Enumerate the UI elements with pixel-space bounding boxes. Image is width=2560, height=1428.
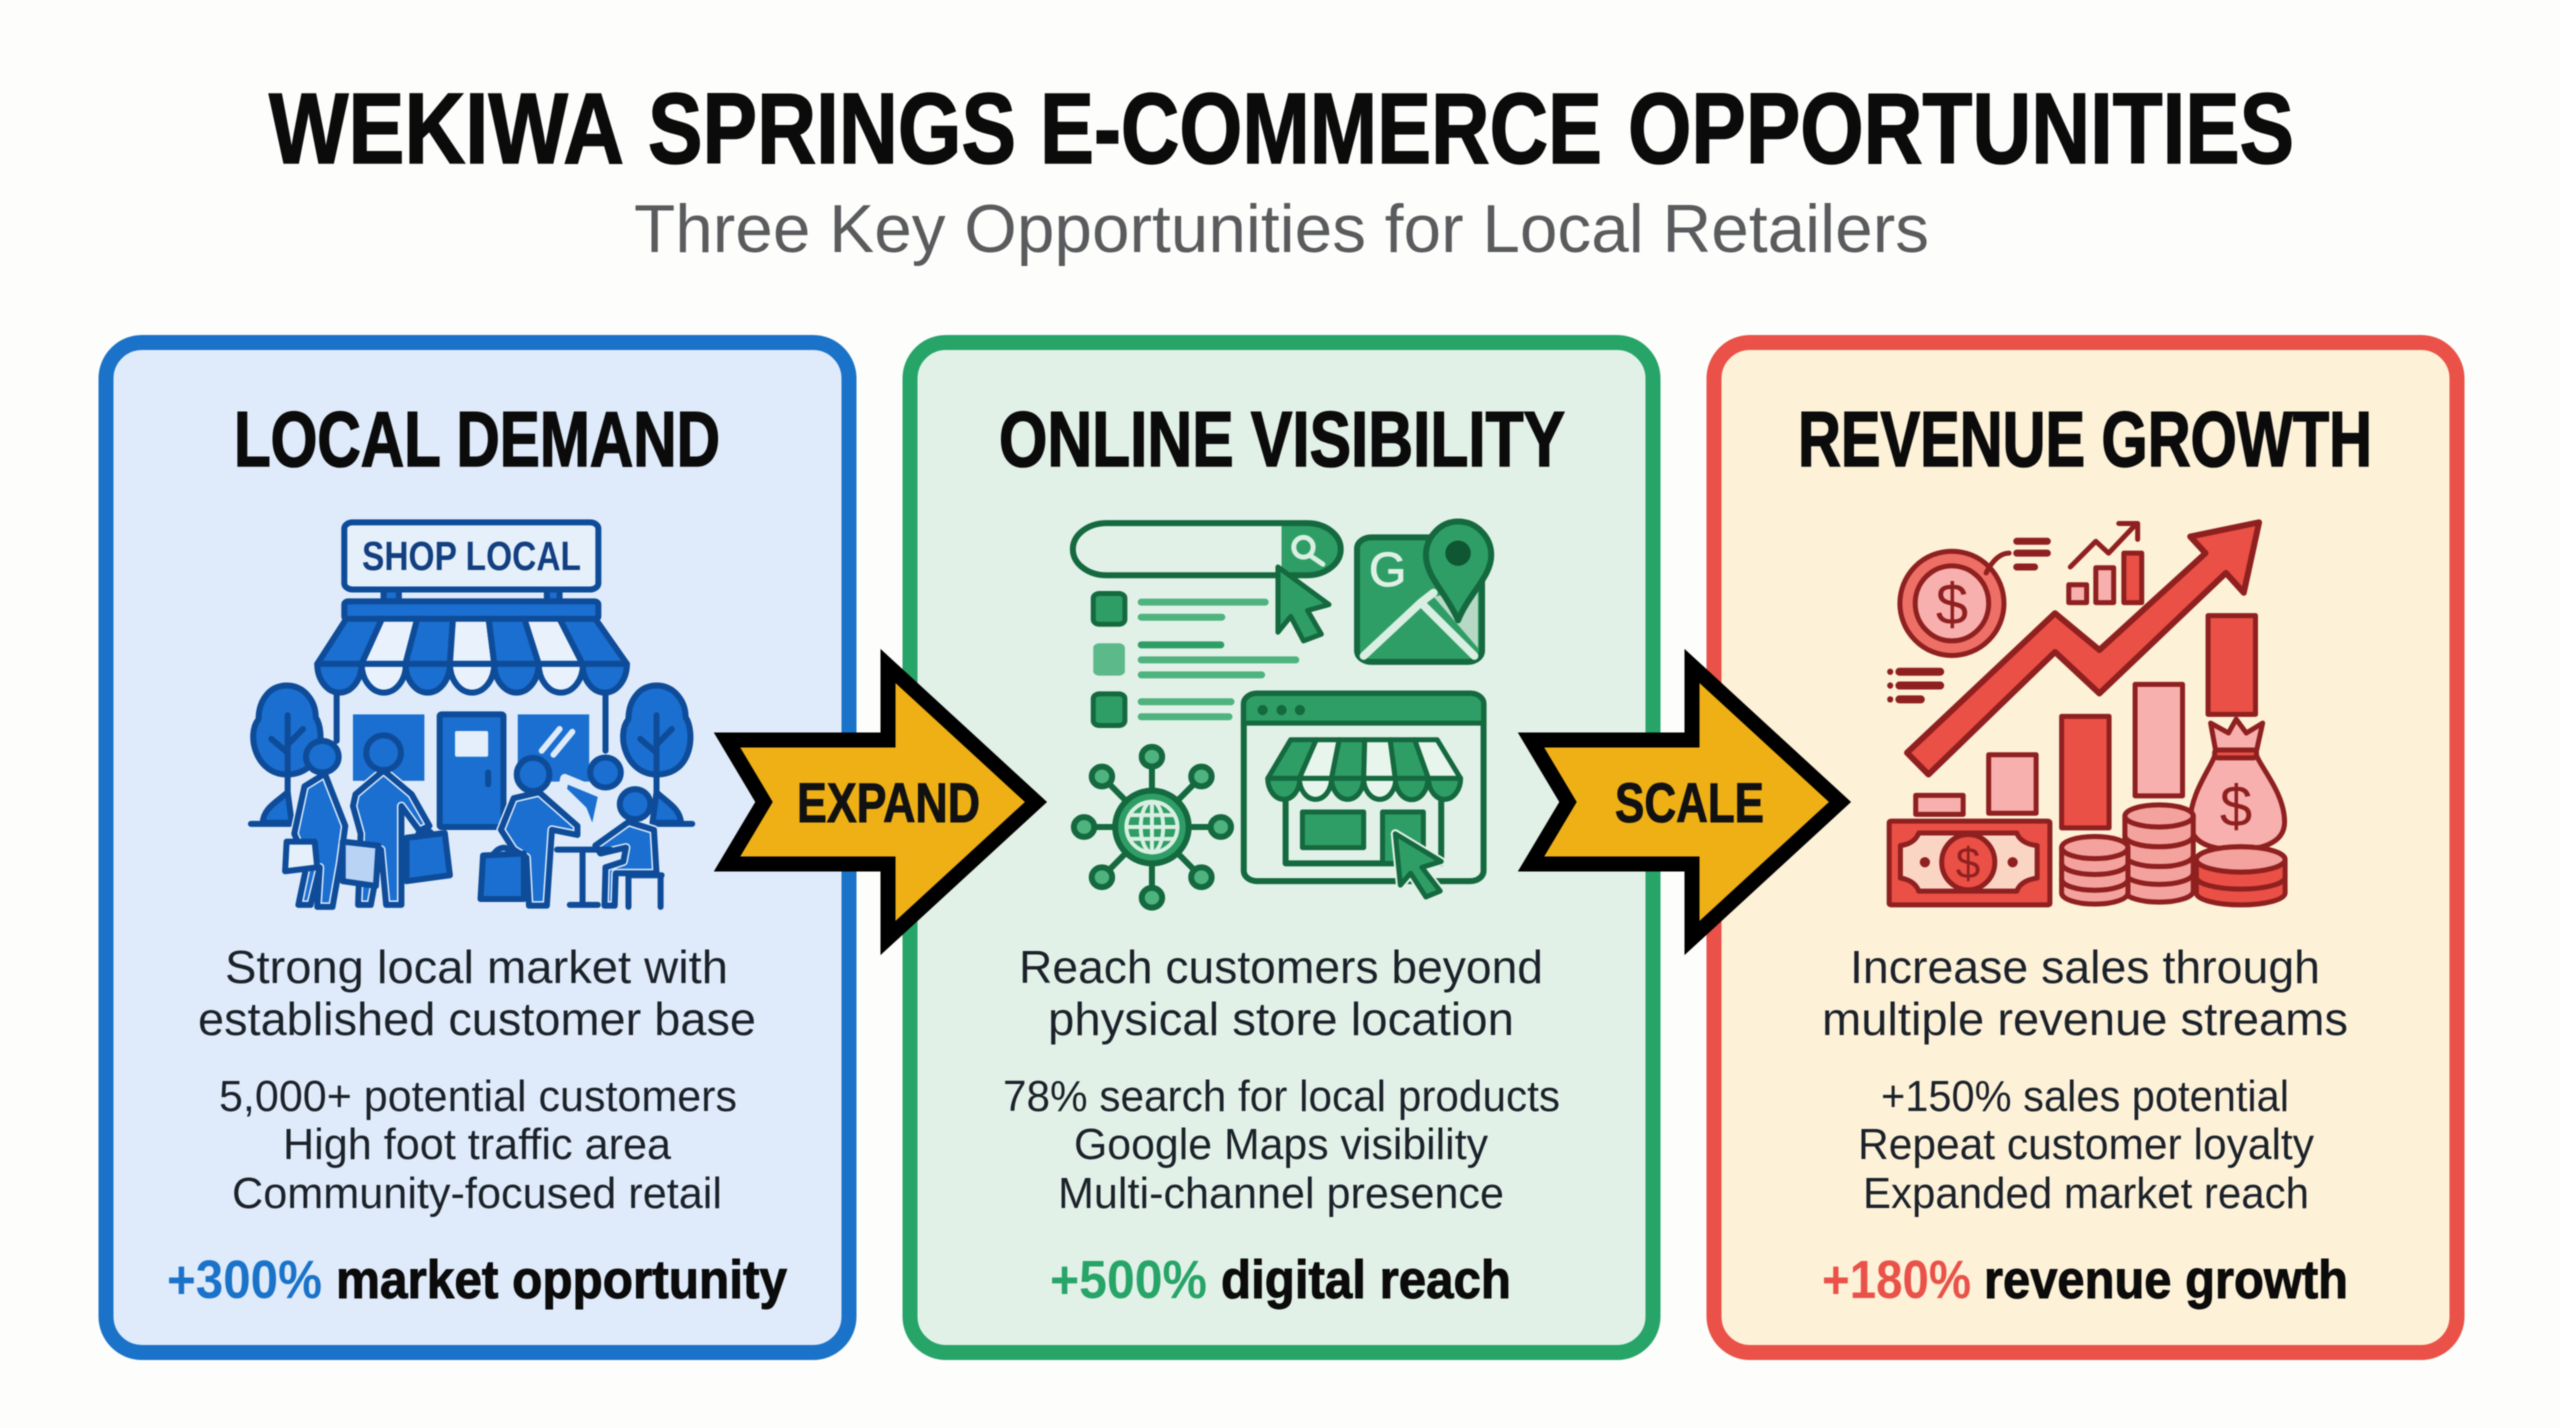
description text: established customer base (198, 993, 756, 1045)
arrow: scale (1531, 666, 1840, 938)
bullet facts (1858, 1072, 2314, 1218)
description text: multiple revenue streams (1822, 993, 2348, 1045)
heading: local demand: LOCAL DEMAND (234, 395, 720, 483)
description text: Increase sales through (1850, 941, 2320, 993)
coin dollar sign: $ (1936, 572, 1968, 637)
callout: market opportunity (167, 1250, 787, 1310)
map tile letter: G (1369, 544, 1406, 597)
callout: revenue growth (1822, 1250, 2348, 1310)
bullet facts (219, 1072, 737, 1218)
heading: revenue growth: REVENUE GROWTH (1798, 395, 2372, 483)
description text (1822, 941, 2348, 1045)
callout: market opportunity: market opportunity (336, 1250, 787, 1310)
arrow: expand: EXPAND (797, 771, 980, 834)
title: WEKIWA (269, 73, 624, 185)
bullet facts: 78% search for local products (1003, 1072, 1560, 1121)
bullet facts (1003, 1072, 1560, 1218)
title: OPPORTUNITIES (1628, 73, 2294, 185)
callout: market opportunity: +300% (167, 1250, 322, 1310)
callout: revenue growth: revenue growth (1984, 1250, 2348, 1310)
bullet facts: High foot traffic area (283, 1120, 672, 1169)
title: SPRINGS (648, 73, 1016, 185)
description text (1019, 941, 1543, 1045)
bag dollar sign: $ (2220, 774, 2252, 839)
arrow: expand (727, 666, 1036, 938)
icon: revenue chart, coins and money (1887, 522, 2285, 905)
bullet facts: Repeat customer loyalty (1858, 1120, 2314, 1169)
sign text: SHOP LOCAL (362, 533, 581, 579)
bullet facts: Multi-channel presence (1058, 1169, 1504, 1218)
subtitle: Three Key Opportunities for Local Retailers (634, 191, 1929, 267)
bullet facts: Google Maps visibility (1074, 1120, 1488, 1169)
bullet facts: +150% sales potential (1881, 1072, 2289, 1121)
callout: digital reach: digital reach (1221, 1250, 1511, 1310)
callout: digital reach: +500% (1050, 1250, 1207, 1310)
bullet facts: Expanded market reach (1863, 1169, 2309, 1218)
callout: digital reach (1050, 1250, 1511, 1310)
panel: online visibility (910, 342, 1653, 1352)
title (269, 73, 2294, 185)
bullet facts: Community-focused retail (232, 1169, 722, 1218)
description text: Reach customers beyond (1019, 941, 1543, 993)
bill dollar sign: $ (1956, 839, 1980, 888)
description text: Strong local market with (225, 941, 728, 993)
panel: local demand (106, 342, 849, 1352)
icon: search, maps, network and web store (1073, 522, 1491, 908)
arrow: scale: SCALE (1615, 771, 1764, 834)
description text: physical store location (1048, 993, 1514, 1045)
icon: shop local storefront with shoppers (251, 522, 692, 907)
bullet facts: 5,000+ potential customers (219, 1072, 737, 1121)
title: E-COMMERCE (1040, 73, 1602, 185)
callout: revenue growth: +180% (1822, 1250, 1971, 1310)
description text (198, 941, 756, 1045)
heading: online visibility: ONLINE VISIBILITY (999, 395, 1565, 483)
panel: revenue growth (1714, 342, 2457, 1352)
